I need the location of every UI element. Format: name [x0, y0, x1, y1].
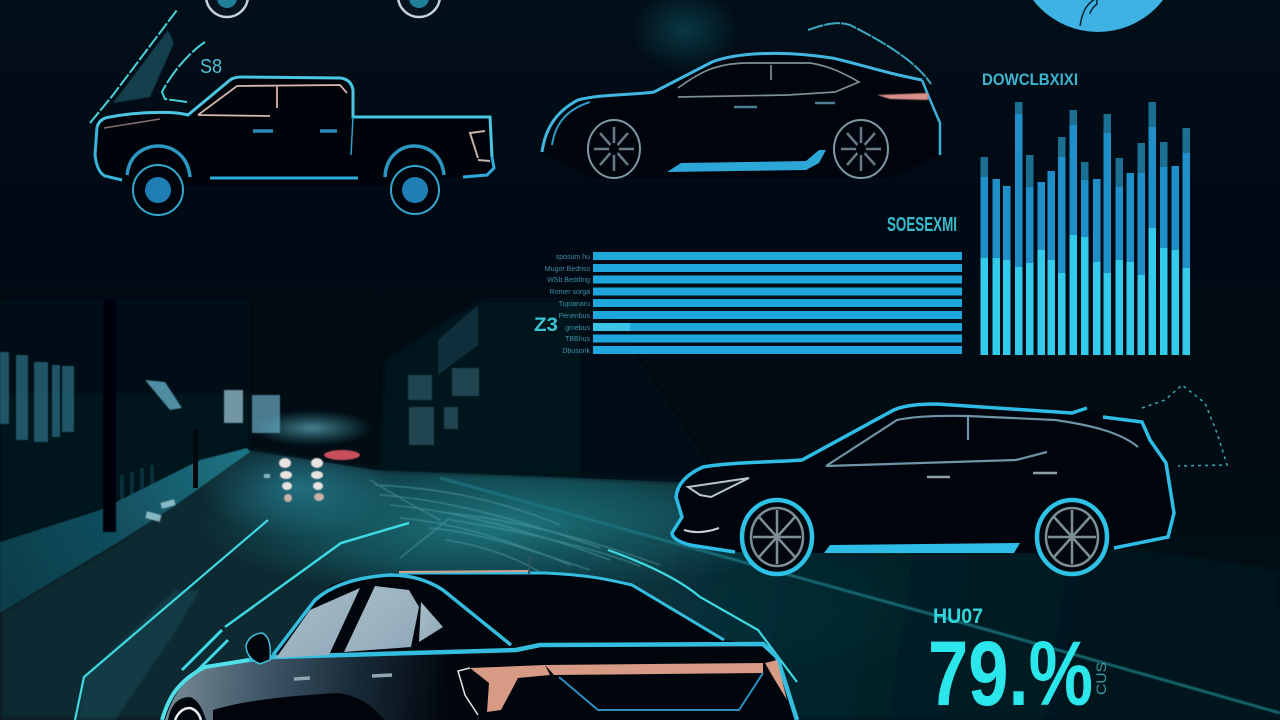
- foreground car wheel arc: [168, 697, 206, 720]
- pickup open hood: [90, 10, 205, 123]
- foreground car mirror: [246, 633, 270, 664]
- pickup label: S8: [200, 56, 222, 78]
- car: foreground sedan: [75, 520, 797, 720]
- SUV headlight: [688, 478, 749, 497]
- stat callout: [928, 605, 1109, 720]
- pickup front wheel: [127, 146, 190, 215]
- bar chart row labels: [545, 254, 590, 355]
- headlight reflections: [279, 458, 324, 502]
- sedan windows: [678, 63, 859, 97]
- sedan tail light: [877, 93, 928, 100]
- foreground car trunk outline: [559, 673, 763, 710]
- road wet reflection streaks: [370, 480, 660, 572]
- sedan door handles: [734, 103, 835, 107]
- sedan body: [542, 53, 940, 178]
- sedan front wheel: [588, 120, 640, 178]
- street pole: [103, 300, 116, 532]
- bar chart bars: [593, 252, 962, 354]
- pickup tail light: [470, 131, 490, 161]
- red tail lights: [324, 450, 360, 460]
- SUV door handles: [927, 473, 1057, 477]
- SUV data constellation: [1142, 385, 1227, 466]
- car: top wheels cropped: [206, 0, 440, 17]
- right buildings: [380, 300, 720, 482]
- SUV rocker: [824, 543, 1020, 553]
- foreground car antenna: [529, 556, 530, 575]
- SUV front wheel: [742, 500, 812, 574]
- SUV windows: [826, 416, 1138, 466]
- road teal light pools: [210, 451, 790, 634]
- car: SUV: [672, 385, 1227, 574]
- bar chart row labels: sposum hu: [556, 254, 590, 261]
- foreground car body: [162, 573, 797, 720]
- car: pickup truck: [90, 10, 494, 215]
- pie chart: [1016, 0, 1180, 32]
- bar chart row labels: Mugor Bedriss: [545, 266, 590, 273]
- foreground car wheel ring: [175, 708, 201, 720]
- foreground car tail lights: [470, 660, 787, 712]
- column chart bars: [980, 102, 1190, 355]
- bar chart row labels: Romer sorga: [550, 289, 590, 296]
- bar chart row labels: Penenbus: [558, 313, 590, 320]
- SUV body: [672, 404, 1174, 553]
- car: top sedan: [542, 23, 940, 178]
- pickup door handles: [253, 129, 337, 133]
- foreground car windows: [276, 586, 443, 658]
- scan contour lines: [75, 520, 797, 720]
- pickup body: [95, 77, 493, 186]
- bar chart row labels: WSb Bedding: [547, 277, 590, 284]
- bar chart row labels: gmebus: [565, 325, 590, 332]
- background glow: [630, 0, 740, 72]
- bar chart row labels: TBBhus: [565, 336, 590, 343]
- bar chart title: SOESEXMI: [887, 214, 957, 236]
- stat side note: CUS: [1093, 662, 1109, 695]
- left fence and building: [0, 300, 280, 542]
- night street scene: [0, 300, 1280, 720]
- bar chart side value: Z3: [534, 315, 558, 336]
- column chart title: DOWCLBXIXI: [982, 70, 1078, 89]
- sidewalk bollard: [193, 430, 198, 488]
- sidewalk: [0, 448, 250, 613]
- foreground car wheel well: [213, 693, 385, 720]
- sidewalk debris: [145, 474, 270, 522]
- foreground car door handles: [294, 675, 392, 679]
- sedan rear wheel: [834, 120, 888, 178]
- SUV rear wheel: [1037, 500, 1107, 574]
- distant glow at vanishing point: [250, 410, 374, 446]
- sedan outline: [542, 53, 922, 152]
- foreground car door panel: [165, 653, 460, 720]
- sedan rocker: [667, 150, 826, 172]
- pickup rear wheel: [385, 146, 444, 214]
- bar chart highlight: [593, 323, 630, 331]
- foreground car taillight white edge: [458, 668, 478, 715]
- stat label: HU07: [933, 605, 983, 628]
- road surface: [0, 450, 1280, 720]
- pickup window line: [198, 85, 347, 116]
- bar chart row labels: Tupianaru: [559, 301, 590, 308]
- pickup outline: [97, 77, 492, 157]
- foreground car outlines: [162, 571, 797, 720]
- bar chart row labels: Dbusonk: [562, 348, 590, 355]
- horizontal bar chart: [534, 214, 962, 355]
- stacked column chart: [980, 70, 1190, 355]
- pickup rocker: [210, 176, 358, 180]
- SUV outline: [672, 404, 1087, 552]
- sedan open tailgate arc: [808, 23, 931, 84]
- road bright edge line: [440, 478, 1280, 713]
